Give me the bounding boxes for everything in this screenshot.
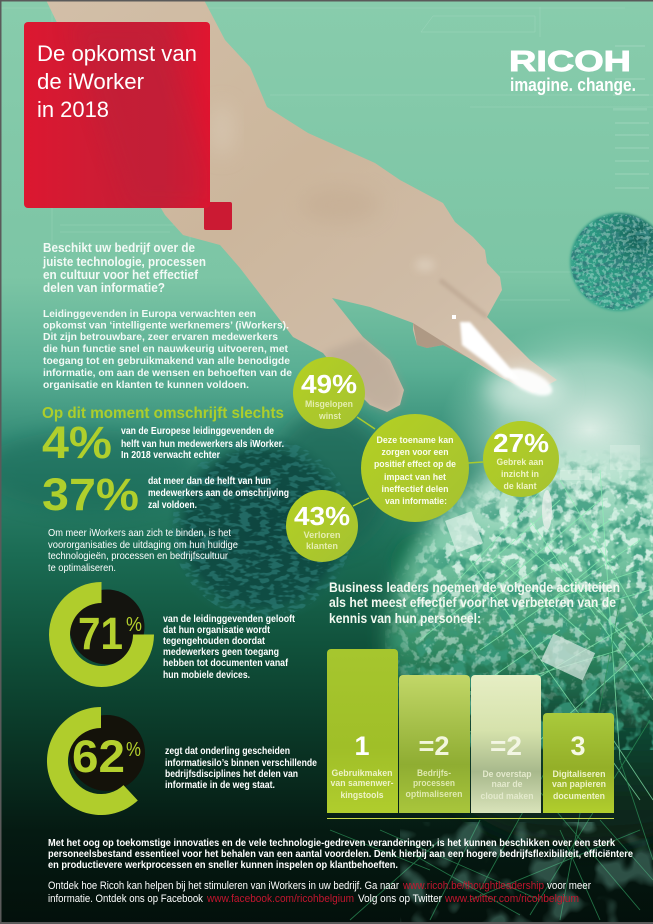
bar: rank 3: 3 [570, 731, 586, 761]
circle: 43 percent: Verloren [304, 530, 341, 541]
call to action with links [48, 880, 591, 905]
call to action with links: informatie. Ontdek ons op Facebook [48, 893, 203, 905]
circle: 27 percent: Gebrek aan [496, 457, 544, 468]
intro question [42, 241, 206, 295]
circle: central message: zorgen voor een [382, 447, 449, 458]
circle: central message [361, 414, 469, 522]
text: 62 percent: informatiesilo’s binnen verschillende [165, 758, 317, 769]
stat: 37 percent: zal voldoen. [148, 500, 197, 511]
challenge paragraph: Om meer iWorkers aan zich te binden, is het [48, 527, 231, 539]
stat: 4 percent: van de Europese leidinggevenden de [121, 426, 274, 437]
text: 62 percent [165, 746, 317, 791]
bar chart heading: Business leaders noemen de volgende activiteiten [329, 580, 620, 595]
subheading: Op dit moment omschrijft slechts [42, 405, 284, 422]
call to action with links: www.twitter.com/ricohbelgium [444, 893, 579, 905]
donut: 62 percent: % [126, 739, 141, 761]
text: 71 percent: hebben tot documenten vanaf [163, 658, 289, 669]
connector lines [353, 417, 483, 506]
circle: 43 percent [286, 490, 358, 562]
intro question: en cultuur voor het effectief [43, 268, 199, 282]
intro question: Beschikt uw bedrijf over de [43, 241, 195, 255]
bar: rank 2 processes: Bedrijfs- [417, 768, 451, 779]
stat: 4 percent: helft van hun medewerkers als iWorker. [121, 439, 284, 450]
bar: rank 3: Digitaliseren [552, 769, 606, 780]
call to action with links: voor meer [547, 880, 591, 892]
circle: 43 percent: klanten [306, 541, 338, 552]
stat: 4 percent [42, 417, 284, 468]
glowing fingertip [452, 315, 565, 412]
closing paragraph: Met het oog op toekomstige innovaties en de vele technologie-gedreven veranderingen, is het kunnen beschikken over een sterk [48, 838, 615, 849]
bar: rank 1 [327, 649, 398, 813]
text: 71 percent: tegengehouden doordat [163, 636, 266, 647]
hand [46, 0, 557, 412]
bar: rank 2 processes: =2 [418, 731, 450, 761]
intro question: delen van informatie? [43, 281, 165, 295]
title [37, 41, 197, 122]
small sphere top right [565, 210, 653, 314]
circle: 27 percent: de klant [504, 481, 537, 492]
circle: 43 percent: 43% [294, 501, 350, 531]
title: De opkomst van [37, 41, 197, 66]
call to action with links: www.facebook.com/ricohbelgium [206, 893, 354, 905]
bar: rank 1: kingstools [340, 790, 384, 801]
circle: 49 percent: 49% [301, 369, 357, 399]
donut: 62 percent: 62 [72, 731, 125, 782]
text: 71 percent: hun mobiele devices. [163, 670, 250, 681]
call to action with links: Ontdek hoe Ricoh kan helpen bij het stimuleren van iWorkers in uw bedrijf. Ga naar [48, 880, 399, 892]
circle: 49 percent [293, 357, 365, 429]
stat: 37 percent: 37% [42, 469, 139, 520]
circle: 27 percent [483, 421, 559, 497]
bar: rank 3: documenten [553, 791, 605, 802]
intro paragraph: organisatie en klanten te kunnen voldoen. [43, 379, 249, 391]
bar chart [327, 649, 614, 819]
bar: rank 2 cloud: naar de [492, 779, 522, 790]
stat: 37 percent: dat meer dan de helft van hun [148, 476, 271, 487]
stat: 4 percent: In 2018 verwacht echter [121, 450, 220, 461]
challenge paragraph: technologieën, processen en bedrijfscultuur [48, 550, 228, 562]
Ricoh logo: RICOH [509, 46, 631, 78]
bar: rank 2 processes [399, 675, 470, 813]
title: in 2018 [37, 97, 109, 122]
circle: 49 percent: winst [318, 411, 342, 422]
challenge paragraph: voororganisaties de uitdaging om hun huidige [48, 539, 238, 551]
closing paragraph: en productievere werkprocessen en sneller kunnen inspelen op klantbehoeften. [48, 860, 398, 871]
text: 62 percent: bedrijfsdisciplines het delen van [165, 769, 298, 780]
bar: rank 2 cloud [471, 675, 541, 813]
Ricoh logo [509, 46, 636, 95]
circle: central message: van informatie: [385, 496, 447, 507]
closing paragraph [48, 838, 633, 871]
bar: rank 3: van papieren [552, 779, 606, 790]
intro paragraph: Leidinggevenden in Europa verwachten een [43, 308, 256, 320]
bar chart heading [329, 580, 620, 626]
challenge paragraph: te optimaliseren. [48, 562, 116, 574]
bar: rank 2 processes: optimaliseren [406, 789, 463, 800]
donut: 62 percent [47, 707, 145, 815]
circle: central message: positief effect op de [374, 459, 456, 470]
bar: rank 2 processes: processen [413, 778, 455, 789]
text: 71 percent: dat hun organisatie wordt [163, 625, 271, 636]
intro paragraph: opkomst van ‘intelligente werknemers’ (iWorkers). [43, 320, 289, 332]
bar: rank 1: 1 [354, 731, 370, 761]
intro paragraph: die hun functie snel en nauwkeurig uitvoeren, met [43, 343, 288, 355]
intro paragraph [43, 308, 292, 391]
bar: rank 3 [543, 713, 614, 813]
circle: central message: Deze toename kan [376, 435, 454, 446]
text: 71 percent: medewerkers geen toegang [163, 647, 279, 658]
stat: 37 percent: medewerkers aan de omschrijving [148, 488, 289, 499]
text: 62 percent: zegt dat onderling gescheiden [165, 746, 290, 757]
donut: 71 percent: % [126, 614, 142, 636]
bar: rank 2 cloud: =2 [490, 731, 522, 761]
bar: rank 1: Gebruikmaken [332, 768, 393, 779]
title: de iWorker [37, 69, 144, 94]
bar: rank 2 cloud: cloud maken [480, 791, 534, 802]
red title box [24, 22, 232, 230]
donut: 71 percent [49, 582, 154, 687]
bar: rank 2 cloud: De overstap [482, 769, 532, 780]
Ricoh logo: imagine. change. [510, 75, 636, 95]
circle: 49 percent: Misgelopen [305, 399, 353, 410]
bar chart heading: als het meest effectief voor het verbeteren van de [329, 595, 616, 610]
dark sphere lower left [172, 436, 419, 618]
intro question: juiste technologie, processen [42, 255, 206, 269]
text: 71 percent [163, 614, 296, 681]
bar chart heading: kennis van hun personeel: [329, 611, 481, 626]
stat: 37 percent [42, 469, 289, 520]
call to action with links: www.ricoh.be/thoughtleadership [402, 880, 544, 892]
circle: central message: impact van het [384, 472, 447, 483]
circle: central message: ineffectief delen [382, 484, 449, 495]
intro paragraph: Dit zijn betrouwbare, zeer ervaren medewerkers [43, 331, 278, 343]
text: 62 percent: informatie in de weg staat. [165, 780, 275, 791]
text: 71 percent: van de leidinggevenden gelooft [163, 614, 296, 625]
stat: 4 percent: 4% [42, 417, 112, 468]
donut: 71 percent: 71 [78, 608, 123, 659]
intro paragraph: toegang tot en gebruikmakend van alle benodigde [43, 355, 290, 367]
bar: rank 1: van samenwer- [330, 778, 394, 789]
digital globe [330, 419, 653, 922]
intro paragraph: informatie, om aan de wensen en behoeften van de [43, 367, 292, 379]
circle: 27 percent: 27% [493, 428, 549, 458]
challenge paragraph [48, 527, 238, 574]
call to action with links: Volg ons op Twitter [358, 893, 442, 905]
circle: 27 percent: inzicht in [501, 469, 539, 480]
